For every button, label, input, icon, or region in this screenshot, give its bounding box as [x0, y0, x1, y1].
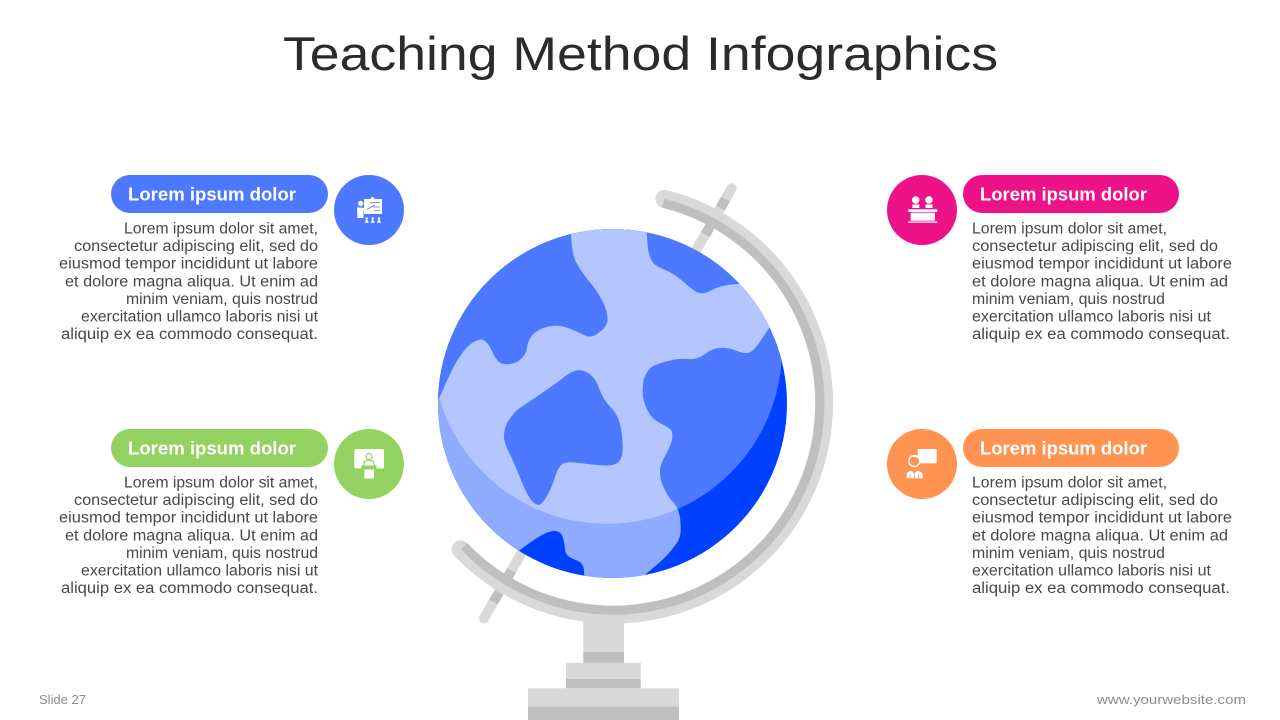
body text: consectetur adipiscing elit, sed do: [74, 492, 318, 509]
icon: teacher at presentation board: [334, 175, 404, 245]
heading pill: Lorem ipsum dolor: [128, 438, 296, 458]
body text: [59, 474, 319, 597]
illustration: desk globe: [420, 170, 824, 720]
body text: et dolore magna aliqua. Ut enim ad: [65, 527, 318, 544]
heading pill: Lorem ipsum dolor: [128, 184, 296, 204]
icon: speaker at podium on screen: [334, 429, 404, 499]
body text: exercitation ullamco laboris nisi ut: [972, 308, 1212, 326]
panel: bottom left: [59, 429, 404, 597]
body text: [972, 474, 1232, 597]
heading pill: [111, 175, 328, 213]
heading pill: Lorem ipsum dolor: [980, 184, 1147, 204]
body text: aliquip ex ea commodo consequat.: [61, 326, 318, 343]
body text: [972, 220, 1232, 343]
icon: two people at desk: [887, 175, 957, 245]
panel: top right: [887, 175, 1232, 343]
heading pill: [963, 429, 1179, 467]
body text: exercitation ullamco laboris nisi ut: [81, 562, 319, 580]
footer: slide number: Slide 27: [39, 692, 86, 707]
heading pill: Lorem ipsum dolor: [980, 438, 1147, 458]
body text: aliquip ex ea commodo consequat.: [61, 580, 318, 597]
body text: Lorem ipsum dolor sit amet,: [124, 474, 318, 491]
body text: consectetur adipiscing elit, sed do: [74, 238, 318, 255]
footer: website: www.yourwebsite.com: [1096, 692, 1246, 707]
body text: et dolore magna aliqua. Ut enim ad: [972, 527, 1228, 544]
body text: consectetur adipiscing elit, sed do: [972, 238, 1218, 255]
globe meridian ring: [461, 199, 824, 615]
body text: eiusmod tempor incididunt ut labore: [972, 256, 1232, 273]
body text: et dolore magna aliqua. Ut enim ad: [65, 273, 318, 290]
heading pill: [963, 175, 1179, 213]
panel: bottom right: [887, 429, 1232, 597]
heading pill: [111, 429, 328, 467]
body text: Lorem ipsum dolor sit amet,: [124, 220, 318, 237]
body text: [59, 220, 319, 343]
title: Teaching Method Infographics: [283, 27, 998, 80]
globe stand base: [528, 615, 679, 720]
body text: et dolore magna aliqua. Ut enim ad: [972, 273, 1228, 290]
body text: minim veniam, quis nostrud: [972, 545, 1165, 562]
globe sphere: [438, 229, 787, 578]
body text: eiusmod tempor incididunt ut labore: [972, 510, 1232, 527]
panel: top left: [59, 175, 404, 343]
body text: minim veniam, quis nostrud: [972, 291, 1165, 308]
body text: Lorem ipsum dolor sit amet,: [972, 220, 1167, 237]
body text: Lorem ipsum dolor sit amet,: [972, 474, 1167, 491]
body text: aliquip ex ea commodo consequat.: [972, 580, 1230, 597]
body text: aliquip ex ea commodo consequat.: [972, 326, 1230, 343]
body text: exercitation ullamco laboris nisi ut: [972, 562, 1212, 580]
body text: exercitation ullamco laboris nisi ut: [81, 308, 319, 326]
body text: minim veniam, quis nostrud: [126, 291, 318, 308]
body text: eiusmod tempor incididunt ut labore: [59, 510, 318, 527]
body text: consectetur adipiscing elit, sed do: [972, 492, 1218, 509]
body text: eiusmod tempor incididunt ut labore: [59, 256, 318, 273]
body text: minim veniam, quis nostrud: [126, 545, 318, 562]
icon: teacher beside board: [887, 429, 957, 499]
globe axis rod: [484, 188, 732, 618]
